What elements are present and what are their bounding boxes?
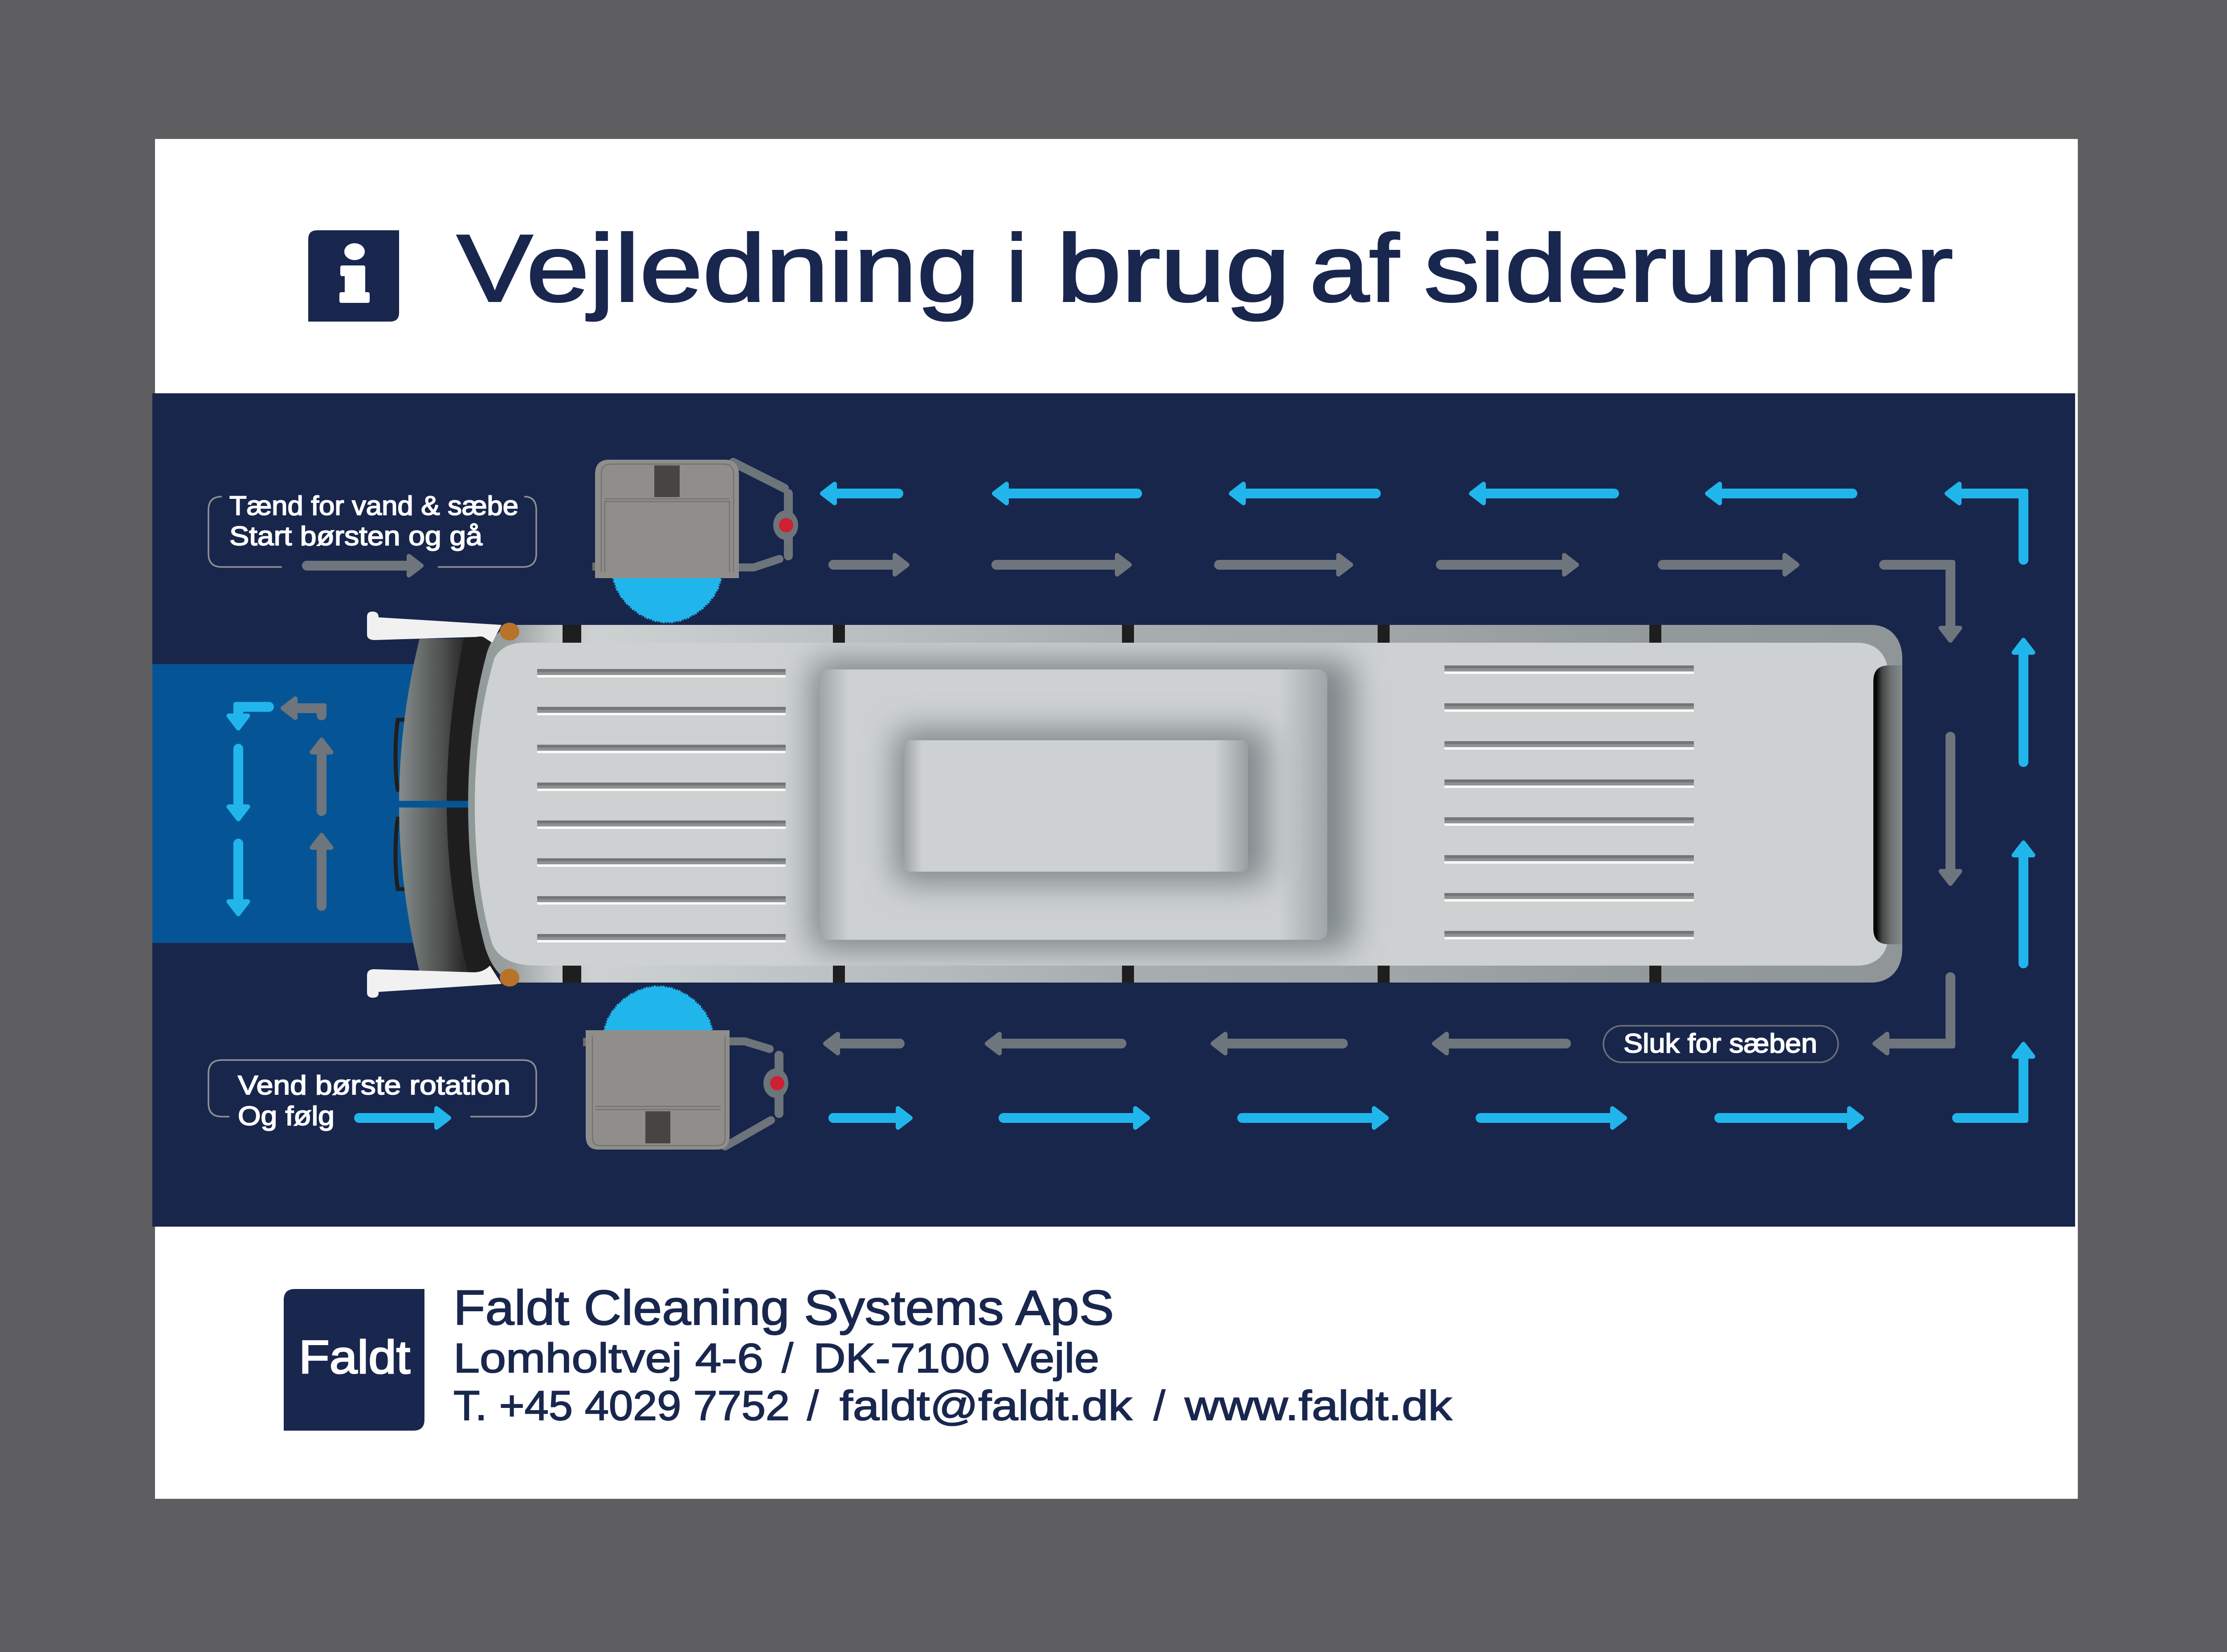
grey down arrow: [1941, 734, 1960, 884]
roof unit shadow: [812, 660, 1353, 950]
contact details: [453, 1382, 1452, 1429]
arrow 2: [1001, 1108, 1148, 1128]
callout text line 2: Og følg: [238, 1101, 334, 1131]
arrows: rear columns: [1875, 640, 2033, 1121]
contact details: faldt@faldt.dk: [840, 1382, 1133, 1429]
company name: Faldt Cleaning Systems ApS: [453, 1281, 1114, 1335]
brush: [614, 578, 721, 622]
arrow 4: [1434, 1034, 1569, 1053]
arrow 3: [1231, 484, 1379, 503]
grey up arrow a: [312, 740, 331, 814]
grey up arrow b: [312, 835, 331, 909]
callout text line 2: Start børsten og gå: [229, 521, 483, 551]
top mirror: [367, 612, 502, 643]
machine body: [592, 563, 596, 571]
title: af: [1309, 215, 1399, 322]
arrow 6 corner: [1947, 484, 2026, 563]
title: brug: [1056, 215, 1290, 322]
callout text line 1: Tænd for vand & sæbe: [229, 491, 518, 521]
arrows: front zone: [229, 698, 331, 914]
arrow 4: [1471, 484, 1617, 503]
arrow 4: [1478, 1108, 1625, 1128]
grey corner arrow: [1875, 975, 1953, 1053]
address: [453, 1335, 1099, 1381]
title: siderunner: [1424, 215, 1953, 322]
contact details: www.faldt.dk: [1184, 1382, 1452, 1429]
footer: [284, 1281, 1452, 1431]
white card: [155, 139, 2078, 1499]
blue down arrow b: [229, 841, 248, 914]
side marks: [563, 625, 1661, 983]
top indicator light: [500, 623, 519, 640]
roof: [475, 643, 1902, 966]
title: [457, 215, 1953, 322]
brush: [605, 987, 712, 1030]
washed front zone: [152, 664, 428, 943]
callout: turn off soap: [1603, 1026, 1838, 1062]
logo: [284, 1289, 424, 1431]
arrow 3: [1213, 1034, 1346, 1053]
rear roof vents: [1444, 665, 1694, 939]
windscreen: [399, 639, 499, 972]
blue corner arrow: [229, 704, 272, 728]
top siderunner machine: [592, 460, 798, 622]
arrow 1: [822, 484, 901, 503]
bus top view: [367, 612, 1902, 998]
arrows: top grey row: [831, 555, 1960, 640]
blue up arrow a: [2014, 640, 2033, 765]
grey corner arrow: [283, 698, 324, 718]
contact details: /: [1154, 1382, 1166, 1429]
arrow 1: [825, 1034, 902, 1053]
callout: reverse rotation: [208, 1060, 536, 1131]
bottom siderunner machine: [583, 987, 788, 1150]
title: Vejledning: [457, 215, 980, 322]
arrow 3: [1240, 1108, 1387, 1128]
machine dark panel: [654, 465, 680, 497]
machine body: [583, 1038, 587, 1046]
contact details: /: [807, 1382, 819, 1429]
rear window: [1873, 665, 1902, 944]
blue corner arrow: [1954, 1044, 2033, 1121]
arrow 1: [831, 555, 907, 575]
arrow 1: [831, 1108, 910, 1128]
arrows: top blue row: [822, 484, 2026, 563]
blue up arrow b: [2014, 843, 2033, 966]
arms and handle: [733, 462, 798, 567]
icon: information: [308, 230, 399, 322]
arrow 4: [1438, 555, 1577, 575]
arrow 2: [994, 555, 1130, 575]
front handles: [396, 720, 406, 889]
address: DK-7100 Vejle: [813, 1335, 1099, 1381]
address: /: [782, 1335, 793, 1381]
arrow 2: [994, 484, 1140, 503]
panel: instruction diagram background: [152, 393, 2075, 1227]
arrows: bottom grey row: [825, 1034, 1569, 1053]
arrow 6 corner: [1881, 562, 1960, 640]
machine dark panel: [645, 1111, 670, 1143]
arrow 3: [1216, 555, 1351, 575]
arrow: follow blue: [356, 1108, 449, 1128]
arrow: follow grey: [304, 556, 421, 575]
arrow 5: [1707, 484, 1855, 503]
arrows: bottom blue row: [831, 1108, 1862, 1128]
callout frame: [208, 497, 536, 567]
roof unit top: [904, 740, 1248, 872]
roof unit base: [820, 669, 1327, 940]
windscreen centre split: [399, 801, 470, 808]
logo: Faldt: [299, 1331, 410, 1383]
address: Lomholtvej 4-6: [453, 1335, 763, 1381]
arms and handle: [725, 1041, 788, 1146]
roof unit top shadow: [895, 730, 1267, 883]
arrow 5: [1660, 555, 1797, 575]
pill frame: [1603, 1026, 1838, 1062]
callout frame: [208, 1060, 536, 1117]
front roof vents: [537, 669, 786, 942]
arrow 2: [987, 1034, 1124, 1053]
title: i: [1006, 215, 1028, 322]
bottom indicator light: [500, 969, 519, 987]
header: [308, 215, 1953, 322]
blue down arrow a: [229, 746, 248, 819]
black windscreen band: [447, 637, 499, 972]
bottom mirror: [367, 966, 502, 998]
callout: start: [208, 491, 536, 575]
arrow 5: [1717, 1108, 1862, 1128]
pill text: Sluk for sæben: [1623, 1028, 1817, 1058]
callout text line 1: Vend børste rotation: [238, 1070, 510, 1100]
contact details: T. +45 4029 7752: [453, 1382, 790, 1429]
bus outer rim: [468, 625, 1902, 983]
